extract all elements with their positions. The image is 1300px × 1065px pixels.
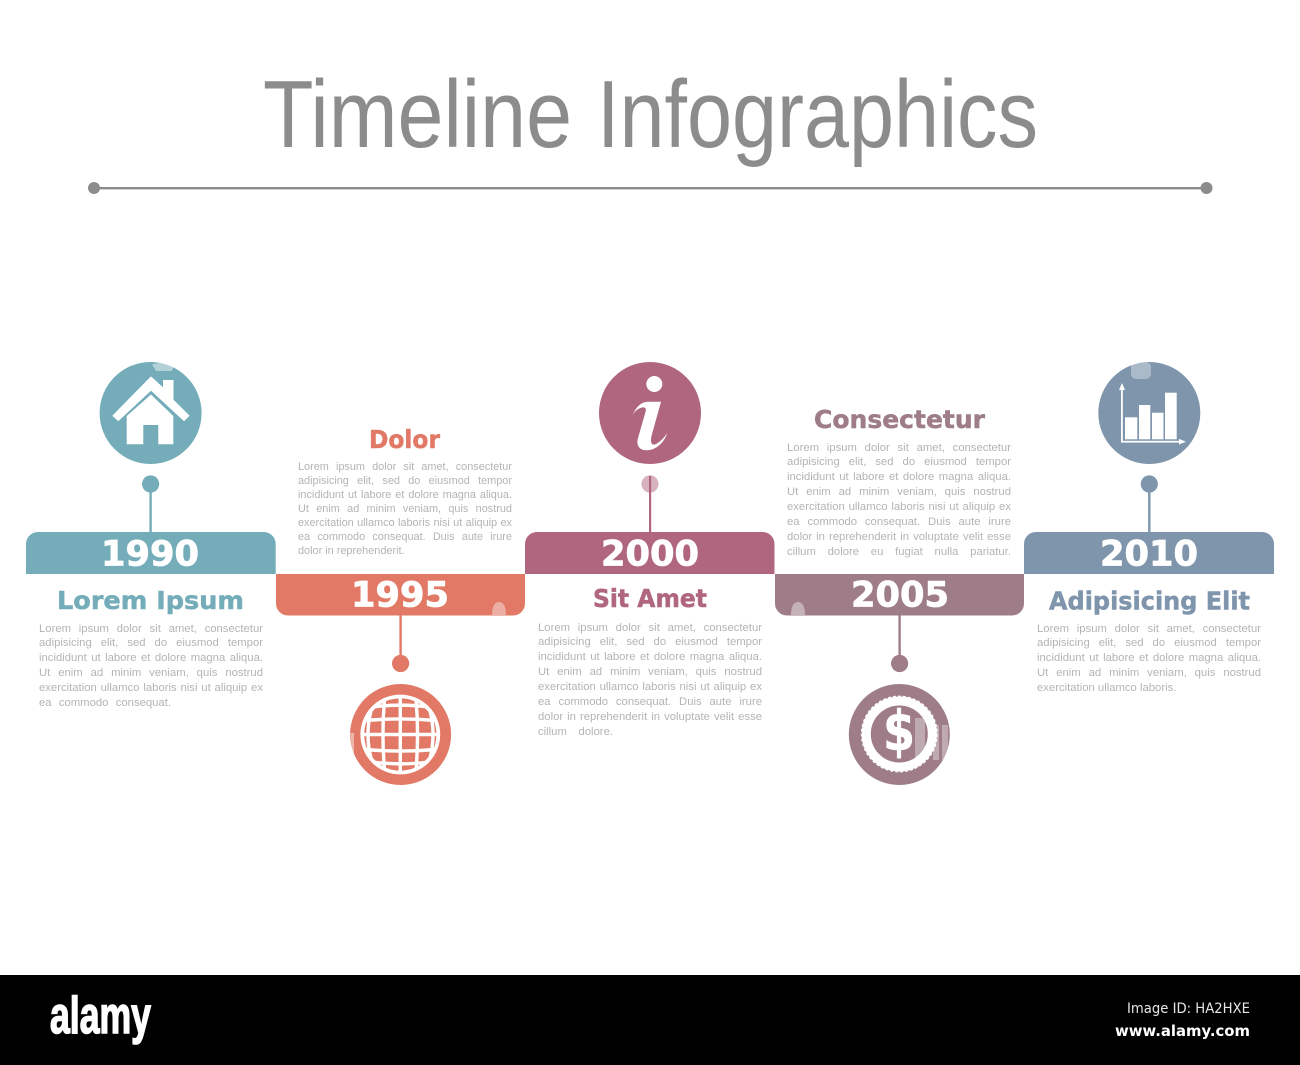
- year tab 2005: 2005: [851, 576, 949, 616]
- title: Timeline: [263, 61, 572, 168]
- body text: Lorem ipsum dolor sit amet, consectetur: [538, 622, 762, 634]
- body text: ea commodo consequat.: [39, 697, 171, 709]
- header: title and rule: [88, 61, 1212, 194]
- body text: Lorem ipsum dolor sit amet, consectetur: [298, 460, 512, 472]
- body text: cillum dolore eu fugiat nulla pariatur.: [787, 546, 1011, 558]
- body text: adipisicing elit, sed do eiusmod tempor: [538, 636, 762, 648]
- body text: [298, 460, 512, 556]
- body text: adipisicing elit, sed do eiusmod tempor: [787, 456, 1011, 468]
- connector pin: [1141, 475, 1158, 534]
- panel: 2000 Sit Amet: [525, 362, 774, 738]
- footer logo: alamy: [50, 987, 151, 1045]
- body text: adipisicing elit, sed do eiusmod tempor: [298, 474, 512, 486]
- body text: Ut enim ad minim veniam, quis nostrud: [39, 667, 263, 679]
- body text: dolor in reprehenderit in voluptate velit esse: [538, 711, 762, 723]
- body text: [1037, 623, 1261, 694]
- body text: ea commodo consequat. Duis aute irure: [538, 696, 762, 708]
- body text: Lorem ipsum dolor sit amet, consectetur: [39, 623, 263, 635]
- body text: [39, 623, 263, 709]
- body text: adipisicing elit, sed do eiusmod tempor: [1037, 637, 1261, 649]
- body text: Lorem ipsum dolor sit amet, consectetur: [787, 442, 1011, 454]
- footer: stock image bar: [0, 975, 1300, 1065]
- panel: 2010 Adipisicing Elit: [1024, 362, 1274, 694]
- body text: exercitation ullamco laboris.: [1037, 682, 1176, 694]
- title: [263, 61, 1038, 168]
- body text: ea commodo consequat. Duis aute irure: [787, 516, 1011, 528]
- body text: exercitation ullamco laboris nisi ut aliquip ex: [538, 681, 762, 693]
- year tab 1990: [26, 532, 276, 574]
- body text: incididunt ut labore et dolore magna aliqua.: [1037, 652, 1261, 664]
- panel: 1990 Lorem Ipsum: [26, 362, 276, 709]
- heading: Adipisicing Elit: [1049, 586, 1250, 616]
- body text: ea commodo consequat. Duis aute irure: [298, 530, 512, 542]
- body text: exercitation ullamco laboris nisi ut aliquip ex: [298, 516, 512, 528]
- body text: exercitation ullamco laboris nisi ut aliquip ex: [787, 501, 1011, 513]
- body text: Lorem ipsum dolor sit amet, consectetur: [1037, 623, 1261, 635]
- connector pin: [142, 475, 159, 534]
- icon: globe: [350, 684, 451, 785]
- panel: 1995 Dolor: [276, 425, 525, 785]
- heading: Lorem Ipsum: [57, 586, 244, 615]
- body text: exercitation ullamco laboris nisi ut aliquip ex: [39, 682, 263, 694]
- year tab 2005: [775, 574, 1024, 616]
- body text: adipisicing elit, sed do eiusmod tempor: [39, 637, 263, 649]
- icon: bar chart: [1098, 362, 1200, 464]
- year tab 1990: 1990: [101, 534, 199, 574]
- image id: Image ID: HA2HXE: [1127, 1001, 1250, 1017]
- body text: Ut enim ad minim veniam, quis nostrud: [1037, 667, 1261, 679]
- icon: dollar coin: [849, 684, 950, 785]
- body text: incididunt ut labore et dolore magna aliqua.: [39, 652, 263, 664]
- heading: Dolor: [369, 425, 441, 454]
- body text: dolor in reprehenderit.: [298, 544, 405, 556]
- body text: [538, 622, 762, 738]
- year tab 2010: 2010: [1100, 534, 1198, 574]
- body text: Ut enim ad minim veniam, quis nostrud: [538, 666, 762, 678]
- icon: dollar coin: $: [883, 699, 915, 763]
- body text: Ut enim ad minim veniam, quis nostrud: [787, 486, 1011, 498]
- connector pin: [392, 615, 409, 672]
- year tab 2000: [525, 532, 774, 574]
- footer url: www.alamy.com: [1115, 1022, 1250, 1040]
- icon: house: [100, 362, 202, 464]
- body text: incididunt ut labore et dolore magna aliqua.: [298, 488, 512, 500]
- connector pin: [891, 615, 908, 672]
- year tab 2010: [1024, 532, 1274, 574]
- body text: Ut enim ad minim veniam, quis nostrud: [298, 502, 512, 514]
- title rule with end dots: [88, 182, 1212, 194]
- body text: incididunt ut labore et dolore magna aliqua.: [538, 651, 762, 663]
- heading: Sit Amet: [593, 584, 707, 613]
- panel: 2005 Consectetur: [775, 405, 1024, 785]
- title: Infographics: [597, 61, 1038, 168]
- connector pin: [641, 475, 659, 534]
- heading: Consectetur: [814, 405, 986, 434]
- icon: info: [599, 362, 701, 464]
- body text: [787, 442, 1011, 558]
- year tab 1995: 1995: [351, 576, 449, 616]
- year tab 1995: [276, 574, 525, 616]
- year tab 2000: 2000: [601, 534, 699, 574]
- body text: dolor in reprehenderit in voluptate velit esse: [787, 531, 1011, 543]
- body text: cillum dolore.: [538, 726, 613, 738]
- body text: incididunt ut labore et dolore magna aliqua.: [787, 471, 1011, 483]
